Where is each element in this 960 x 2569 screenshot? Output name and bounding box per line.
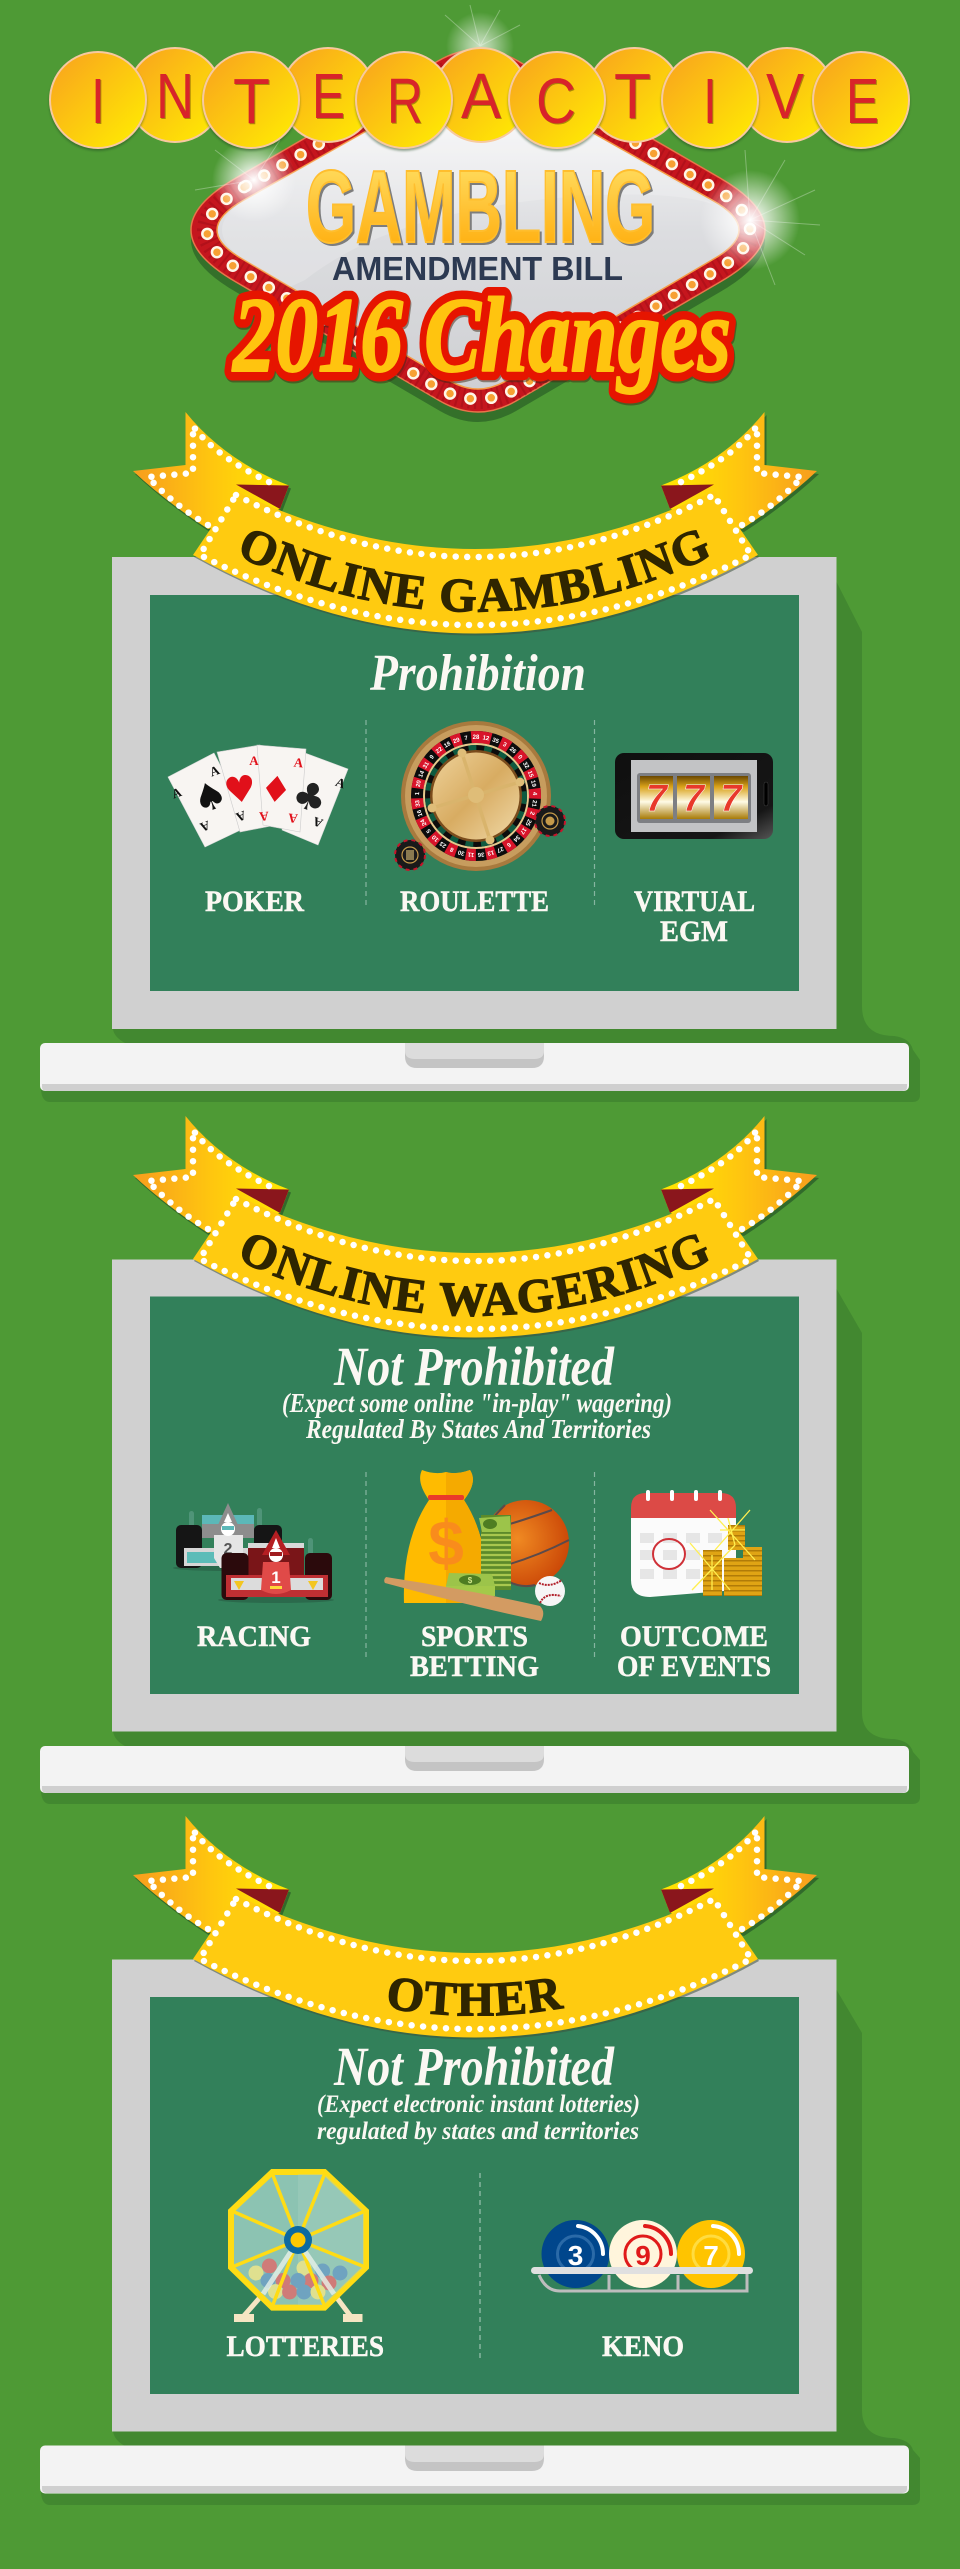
car 2: [173, 1503, 283, 1571]
bezel: [112, 1260, 836, 1732]
notch: [405, 1043, 544, 1068]
letters: V: [766, 60, 804, 132]
icon: slot machine tablet: 7: [646, 778, 669, 820]
chips: [395, 806, 565, 870]
pocket numbers: 0: [516, 754, 523, 761]
money stack: [479, 1515, 511, 1590]
pocket numbers: 35: [491, 737, 500, 745]
baseball: [535, 1576, 565, 1606]
icon: four aces: A: [249, 753, 259, 768]
balls: [248, 2258, 348, 2300]
notch: [405, 2446, 544, 2471]
sign: Las Vegas style marquee: [191, 50, 765, 422]
label: VIRTUAL EGM: VIRTUAL: [634, 885, 755, 918]
label: OUTCOME OF EVENTS: OF EVENTS: [617, 1650, 771, 1683]
odd coins: [50, 52, 909, 148]
icon: roulette wheel: [395, 721, 565, 871]
laptop 1: [40, 557, 920, 1102]
coins: [703, 1525, 762, 1596]
pocket numbers: 22: [435, 746, 445, 755]
pocket numbers: 13: [486, 848, 495, 856]
pocket numbers: 2: [528, 810, 535, 816]
title: INTERACTIVE on coins: [50, 48, 909, 148]
laptop 2: [40, 1260, 920, 1804]
pocket numbers: 10: [431, 833, 440, 842]
pocket numbers: 21: [530, 800, 537, 808]
label: KENO: KENO: [602, 2330, 684, 2363]
pocket numbers: 20: [416, 779, 423, 788]
pocket numbers: 17: [518, 826, 527, 835]
icon: four aces: A: [287, 810, 298, 826]
note: regulated: Regulated By States And Territories: [305, 1414, 651, 1444]
icon: four aces: A: [258, 809, 269, 824]
base: [40, 1043, 909, 1091]
screen: [150, 1296, 799, 1694]
laptop 3: [40, 1960, 920, 2505]
screen: [150, 595, 799, 991]
pocket numbers: 32: [521, 761, 530, 771]
glints: [195, 5, 820, 285]
icon: four aces: ♣: [286, 770, 334, 824]
pocket numbers: 8: [449, 845, 455, 852]
pocket numbers: 5: [426, 827, 433, 834]
pocket numbers: 16: [416, 808, 424, 817]
letters: T: [614, 60, 651, 132]
car 2: 2: [224, 1541, 233, 1558]
letters: [91, 60, 879, 137]
even coins: [128, 48, 834, 142]
icon: slot machine tablet: 7: [683, 778, 706, 820]
pocket numbers: 24: [420, 817, 428, 826]
ribbon: ONLINE WAGERING: [133, 1116, 819, 1340]
label: RACING: RACING: [197, 1620, 311, 1653]
small bills: [446, 1573, 495, 1596]
icon: keno balls and tray: 7: [703, 2240, 719, 2271]
tray: [531, 2267, 753, 2274]
icon: lottery wheel: [231, 2172, 366, 2322]
base: [40, 2446, 909, 2494]
legs: [242, 2294, 352, 2318]
label: LOTTERIES: LOTTERIES: [226, 2330, 384, 2363]
pocket numbers: 1: [415, 791, 421, 795]
baseball bat: [384, 1577, 543, 1621]
letters: I: [91, 65, 105, 137]
label: ROULETTE: ROULETTE: [400, 885, 549, 918]
label: SPORTS BETTING: BETTING: [410, 1650, 539, 1683]
icon: four aces: [168, 745, 348, 847]
icon: four aces: A: [169, 784, 184, 801]
icon: slot machine tablet: 7: [720, 778, 743, 820]
pocket numbers: 29: [452, 737, 461, 745]
sign shadow: [191, 60, 765, 422]
note: in-play wagering: (Expect some online "in-play" wagering): [282, 1388, 672, 1418]
letters: E: [312, 60, 345, 132]
screen: [150, 1997, 799, 2394]
pocket numbers: 25: [523, 818, 532, 827]
pocket numbers: 33: [415, 799, 422, 807]
car 1: [218, 1530, 334, 1603]
pocket numbers: 3: [501, 742, 508, 749]
pocket numbers: 11: [467, 850, 474, 857]
heading: AMENDMENT BILL: AMENDMENT BILL: [332, 250, 623, 287]
icon: money bag, basketball, baseball bat: [384, 1470, 569, 1621]
car 1: 1: [271, 1568, 281, 1587]
pocket numbers: 6: [505, 841, 511, 848]
divider: [479, 2173, 481, 2359]
note: regulated: regulated by states and territories: [317, 2118, 639, 2145]
icon: four aces: A: [207, 762, 222, 779]
icon: keno balls and tray: 3: [568, 2240, 583, 2271]
spokes: [232, 2173, 365, 2307]
pocket numbers: 15: [526, 770, 534, 779]
spokes: [432, 753, 520, 840]
ribbon: OTHER: OTHER: [388, 1978, 564, 2016]
icon: four aces: A: [234, 808, 248, 825]
money bag: [404, 1470, 487, 1603]
pocket numbers: 36: [477, 851, 485, 857]
pocket numbers: 12: [482, 735, 490, 742]
dividers: [366, 720, 594, 908]
letters: I: [703, 65, 717, 137]
label: SPORTS BETTING: [410, 1620, 539, 1683]
icon: four aces: A: [198, 818, 212, 835]
pocket numbers: 27: [495, 845, 504, 853]
letters: R: [387, 65, 423, 137]
icon: calendar and coins: [631, 1490, 762, 1597]
base: [40, 1746, 909, 1793]
pocket numbers: 7: [464, 735, 469, 742]
money bag: $: [428, 1507, 464, 1579]
ribbon: ONLINE GAMBLING: [133, 412, 819, 636]
letters: A: [461, 60, 501, 132]
pocket numbers: 30: [457, 848, 465, 856]
icon: keno balls and tray: [531, 2220, 753, 2291]
ribbon: OTHER: [133, 1816, 819, 2040]
pocket numbers: 23: [438, 839, 448, 848]
heading: GAMBLING: GAMBLING: [306, 149, 655, 264]
basketball: [483, 1500, 569, 1586]
dividers: [366, 1472, 594, 1660]
laptop shadow: [41, 1288, 920, 1804]
heading: Prohibition: Prohibition: [369, 645, 586, 702]
letters: E: [846, 65, 879, 137]
icon: four aces: A: [310, 814, 325, 831]
icon: four aces: ♦: [258, 768, 294, 813]
letters: T: [233, 65, 270, 137]
small bills: $: [468, 1576, 473, 1585]
ribbon: ONLINE WAGERING: ONLINE WAGERING: [242, 1234, 709, 1317]
icon: four aces: A: [293, 755, 305, 771]
icon: four aces: A: [334, 774, 348, 792]
laptop shadow: [41, 581, 920, 1102]
laptop shadow: [41, 1989, 920, 2505]
pocket numbers: 34: [511, 833, 521, 843]
heading: 2016 Changes: 2016 Changes: [231, 277, 731, 395]
pocket numbers: 26: [508, 746, 517, 756]
heading: Not Prohibited: Not Prohibited: [333, 2036, 615, 2097]
pocket numbers: 28: [473, 735, 480, 741]
letters: C: [536, 65, 576, 137]
pocket numbers: 19: [529, 780, 536, 788]
pocket numbers: 14: [418, 770, 426, 779]
label: VIRTUAL EGM: EGM: [660, 915, 728, 948]
motion streaks: [189, 1508, 313, 1568]
sparkles: [690, 1510, 755, 1590]
label: OUTCOME OF EVENTS: OUTCOME: [620, 1620, 768, 1653]
pocket numbers: 9: [429, 754, 436, 761]
label: SPORTS BETTING: SPORTS: [421, 1620, 528, 1653]
ribbon: ONLINE GAMBLING: ONLINE GAMBLING: [242, 530, 709, 612]
icon: slot machine tablet: [615, 753, 773, 839]
letters: N: [156, 60, 194, 132]
label: OUTCOME OF EVENTS: [617, 1620, 771, 1683]
bezel: [112, 1960, 836, 2432]
label: VIRTUAL EGM: [634, 885, 755, 948]
heading: 2016 Changes: 2016 Changes: [231, 277, 731, 395]
bezel: [112, 557, 836, 1029]
icon: keno balls and tray: 9: [635, 2240, 651, 2271]
icon: racing cars: [173, 1503, 334, 1603]
notch: [405, 1746, 544, 1771]
label: POKER: POKER: [205, 885, 304, 918]
pocket numbers: [415, 735, 537, 857]
heading: Not Prohibited: Not Prohibited: [333, 1336, 615, 1397]
pocket numbers: 18: [443, 741, 453, 750]
note: electronic instant lotteries: (Expect electronic instant lotteries): [317, 2091, 640, 2118]
icon: four aces: ♠: [186, 770, 234, 824]
icon: four aces: ♥: [221, 768, 259, 813]
pocket numbers: 31: [422, 761, 431, 770]
pocket numbers: 4: [531, 792, 537, 796]
